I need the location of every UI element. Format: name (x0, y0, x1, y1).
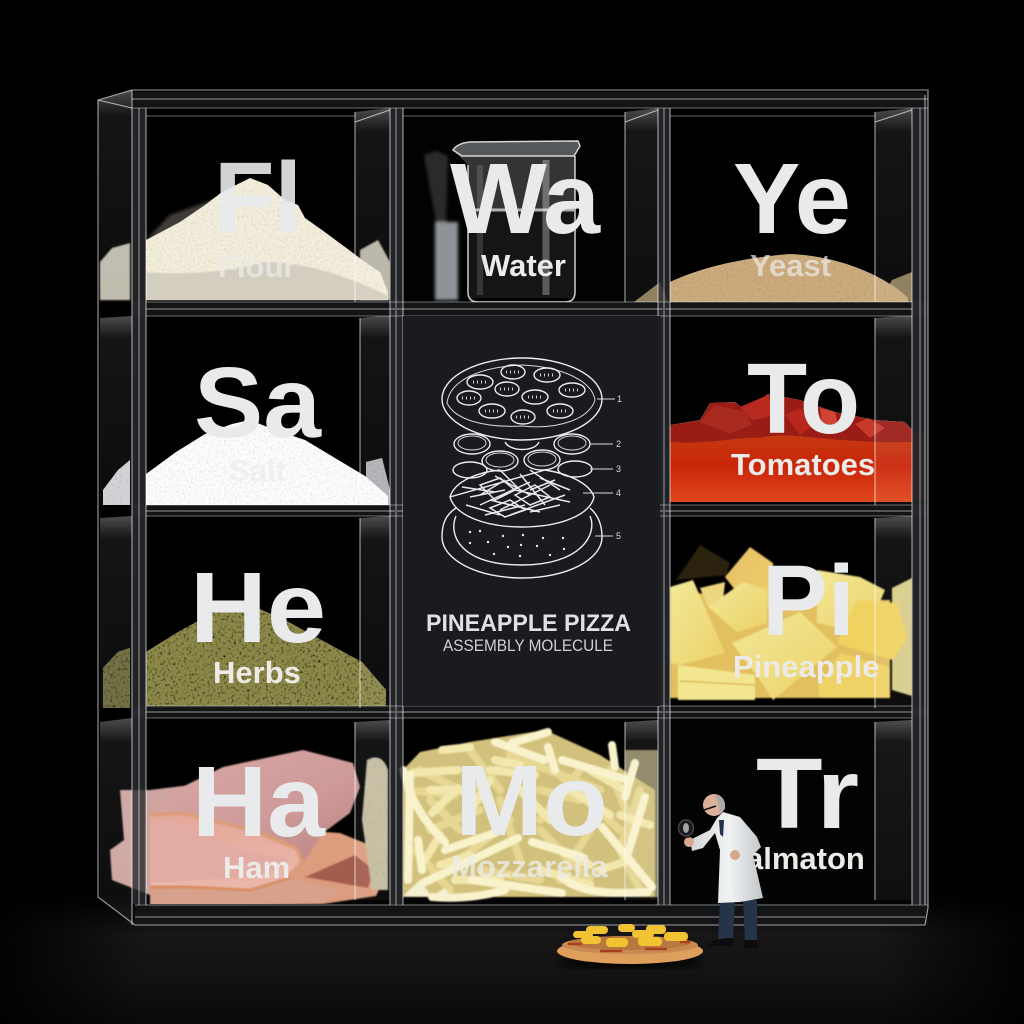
mini pizza (557, 924, 703, 968)
element: Ha: Ha (192, 746, 326, 858)
callout numbers: 1 (617, 394, 622, 404)
callout numbers: 4 (616, 488, 621, 498)
panel: ham (110, 750, 388, 907)
element: Tr: Tr (756, 738, 859, 850)
panel: water beaker (403, 116, 658, 302)
element: To (731, 343, 875, 482)
diagram: exploded pizza layers (442, 358, 622, 578)
coat (690, 812, 763, 903)
panel: yeast (634, 254, 912, 302)
layer 2: pepperoni (454, 434, 590, 471)
shelves and frame bars (132, 92, 928, 925)
glass edge highlights (98, 90, 928, 925)
side walls (98, 90, 912, 925)
element: Fl: Flour (218, 249, 296, 284)
element: Ye: Yeast (750, 248, 831, 283)
element: Pi: Pi (762, 545, 855, 657)
card title: PINEAPPLE PIZZA (426, 610, 631, 637)
element: Mo: Mozzarella (451, 849, 609, 884)
element: Pi (733, 545, 879, 684)
shoes (709, 938, 757, 948)
figure: scientist with magnifying glass (678, 794, 763, 948)
panel: centre diagram card (403, 316, 660, 706)
element: To: To (747, 343, 860, 455)
layer 1: assembled pizza (442, 358, 602, 440)
callout numbers: 5 (616, 531, 621, 541)
hand and magnifier (678, 820, 694, 847)
element: Pi: Pineapple (733, 649, 879, 684)
panel: tomatoes (670, 394, 924, 502)
element: Wa: Water (481, 248, 566, 283)
element: Ye: Ye (733, 143, 851, 255)
glass case frame (98, 90, 928, 925)
callout numbers (583, 394, 622, 541)
callout numbers: 2 (616, 439, 621, 449)
legs (718, 900, 757, 941)
card subtitle: ASSEMBLY MOLECULE (443, 637, 613, 655)
element: Tr: almaton (746, 841, 865, 876)
element: He: Herbs (213, 655, 301, 690)
tie (719, 820, 724, 837)
layer 3: pineapple (453, 461, 592, 478)
element: He: He (190, 552, 326, 664)
element: To: Tomatoes (731, 447, 875, 482)
panel: pineapple (670, 545, 912, 700)
element: Wa: Wa (450, 143, 601, 255)
panel: herbs (103, 604, 386, 708)
panel: empty tray back (670, 720, 912, 900)
head (703, 794, 725, 816)
panel: flour (100, 178, 390, 300)
element: Tr (746, 738, 865, 876)
element: Sa: Sa (194, 347, 322, 459)
callout numbers: 3 (616, 464, 621, 474)
panel: salt (103, 420, 390, 505)
floor (0, 895, 1024, 1024)
left hand (730, 850, 740, 860)
element: Fl: Fl (214, 142, 302, 254)
layer 4: cheese (450, 470, 594, 527)
element: Sa: Salt (229, 453, 286, 488)
element: Ha: Ham (223, 850, 290, 885)
panel: mozzarella (403, 730, 658, 898)
layer 5: crust (442, 508, 602, 578)
element: Mo: Mo (455, 745, 608, 857)
